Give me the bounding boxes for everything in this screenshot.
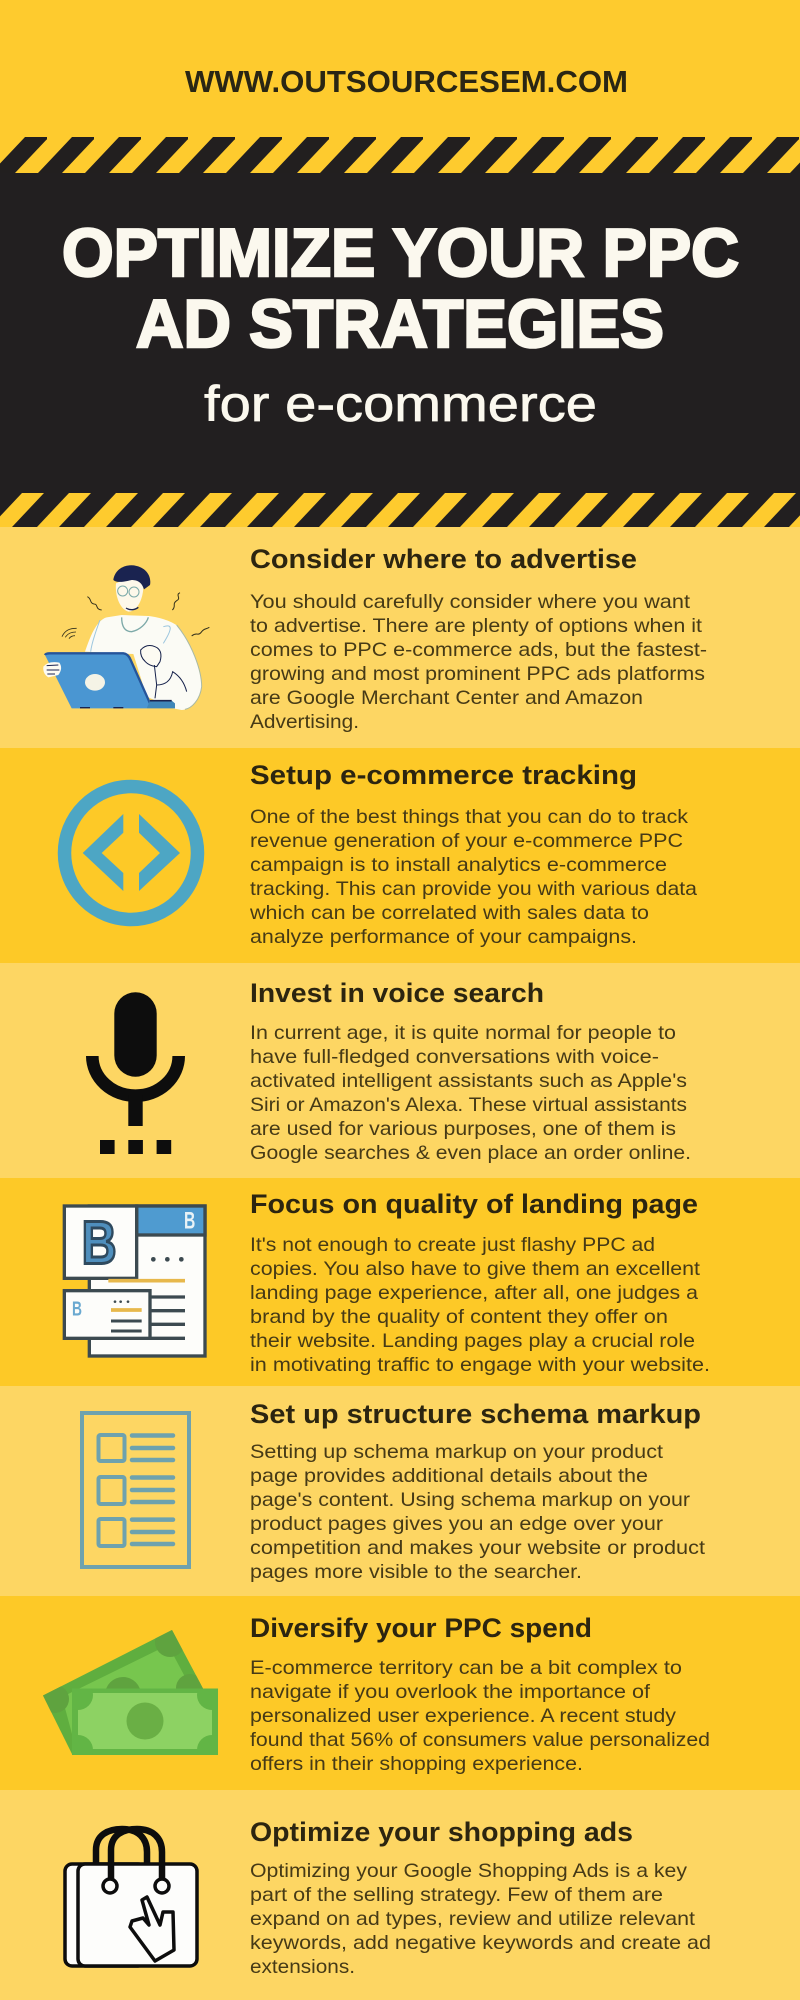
body text: have full-fledged conversations with voice- [250, 1046, 659, 1068]
panel: set up structure schema markup [0, 1386, 800, 1596]
icon: document checklist [82, 1413, 189, 1567]
body text: revenue generation of your e-commerce PPC [250, 830, 683, 852]
body text: offers in their shopping experience. [250, 1753, 583, 1775]
body text: in motivating traffic to engage with your website. [250, 1354, 710, 1376]
panel: setup e-commerce tracking [0, 748, 800, 963]
body text: campaign is to install analytics e-commerce [250, 854, 667, 876]
body text: navigate if you overlook the importance of [250, 1681, 651, 1703]
body text: page provides additional details about the [250, 1465, 648, 1487]
body text [250, 591, 707, 733]
icon: landing page windows: B [82, 1208, 117, 1277]
body text: E-commerce territory can be a bit complex to [250, 1657, 682, 1679]
body text: brand by the quality of content they offer on [250, 1306, 668, 1328]
icon: man with laptop [43, 565, 209, 710]
heading: Optimize your shopping ads [250, 1817, 633, 1847]
body text: Advertising. [250, 711, 359, 733]
body text: Google searches & even place an order online. [250, 1142, 691, 1164]
panel: focus on quality of landing page [0, 1178, 800, 1386]
panel: consider where to advertise [0, 527, 800, 748]
body text [250, 1234, 710, 1376]
body text: Setting up schema markup on your product [250, 1441, 664, 1463]
body text: product pages gives you an edge over your [250, 1513, 664, 1535]
body text: landing page experience, after all, one judges a [250, 1282, 698, 1304]
body text: page's content. Using schema markup on your [250, 1489, 691, 1511]
body text: personalized user experience. A recent study [250, 1705, 676, 1727]
body text: comes to PPC e-commerce ads, but the fastest- [250, 639, 707, 661]
icon: microphone [92, 992, 179, 1154]
body text: to advertise. There are plenty of options when it [250, 615, 703, 637]
icon: money bills [43, 1630, 218, 1755]
title [62, 215, 739, 362]
icon: landing page windows: B [184, 1208, 195, 1235]
body text: growing and most prominent PPC ads platforms [250, 663, 705, 685]
heading: Focus on quality of landing page [250, 1189, 698, 1219]
heading: Set up structure schema markup [250, 1399, 701, 1429]
body text: Optimizing your Google Shopping Ads is a key [250, 1860, 687, 1882]
body text: tracking. This can provide you with various data [250, 878, 697, 900]
subtitle: for e-commerce [204, 376, 597, 432]
body text: part of the selling strategy. Few of them are [250, 1884, 663, 1906]
panel: diversify your ppc spend [0, 1596, 800, 1790]
body text [250, 1860, 711, 1978]
title: OPTIMIZE YOUR PPC [62, 215, 739, 291]
body text: expand on ad types, review and utilize relevant [250, 1908, 696, 1930]
icon: code circle [64, 786, 198, 920]
heading: Diversify your PPC spend [250, 1613, 592, 1643]
body text: pages more visible to the searcher. [250, 1561, 582, 1583]
body text [250, 1441, 706, 1583]
body text: are used for various purposes, one of them is [250, 1118, 676, 1140]
panel: top website banner [0, 0, 800, 137]
body text [249, 806, 697, 948]
heading: Invest in voice search [250, 978, 544, 1008]
body text: which can be correlated with sales data to [249, 902, 649, 924]
panel: title band [0, 137, 800, 527]
body text: analyze performance of your campaigns. [250, 926, 637, 948]
panel: invest in voice search [0, 963, 800, 1178]
icon: landing page windows [64, 1206, 205, 1356]
heading: Consider where to advertise [250, 544, 637, 574]
body text: extensions. [250, 1956, 355, 1978]
panel: optimize your shopping ads [0, 1790, 800, 2000]
title: AD STRATEGIES [136, 286, 664, 362]
body text: In current age, it is quite normal for people to [250, 1022, 676, 1044]
body text: One of the best things that you can do to track [250, 806, 688, 828]
body text: are Google Merchant Center and Amazon [250, 687, 643, 709]
body text: It's not enough to create just flashy PPC ad [250, 1234, 655, 1256]
heading: Setup e-commerce tracking [250, 760, 637, 790]
body text: Siri or Amazon's Alexa. These virtual assistants [250, 1094, 687, 1116]
body text: competition and makes your website or product [250, 1537, 706, 1559]
body text [250, 1657, 710, 1775]
body text: activated intelligent assistants such as Apple's [250, 1070, 687, 1092]
website address: WWW.OUTSOURCESEM.COM [185, 64, 628, 99]
body text: found that 56% of consumers value personalized [250, 1729, 710, 1751]
body text: keywords, add negative keywords and create ad [250, 1932, 711, 1954]
body text [250, 1022, 691, 1164]
body text: You should carefully consider where you want [250, 591, 691, 613]
icon: landing page windows: B [72, 1297, 82, 1320]
body text: their website. Landing pages play a crucial role [250, 1330, 695, 1352]
body text: copies. You also have to give them an excellent [250, 1258, 701, 1280]
icon: shopping bag with pointer [65, 1829, 197, 1966]
